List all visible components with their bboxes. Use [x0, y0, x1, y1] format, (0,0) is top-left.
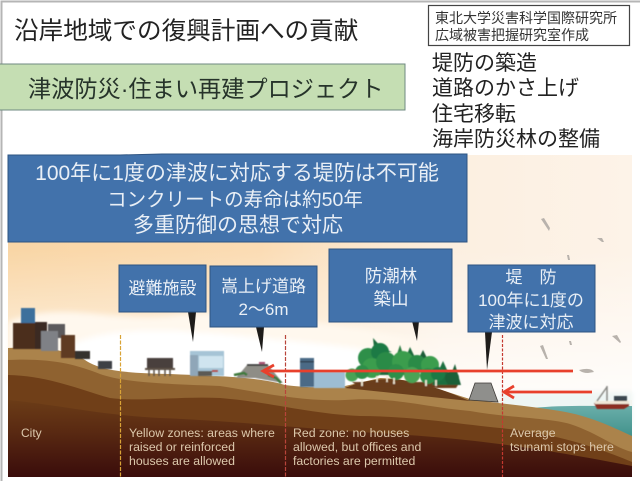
label: city: City: [21, 426, 42, 440]
label: yellow zones: Yellow zones: areas where: [129, 426, 275, 440]
title: 沿岸地域での復興計画への貢献: [14, 17, 358, 45]
credit box: 東北大学災害科学国際研究所: [435, 10, 617, 26]
illustration: coastal cross-section: [8, 155, 632, 477]
label: yellow zones: houses are allowed: [129, 454, 235, 468]
zone line: yellow: [120, 335, 122, 477]
label: yellow zones: raised or reinforced: [129, 440, 235, 454]
callout: coastal forest: 防潮林: [365, 266, 417, 286]
zone line: tsunami limit: [502, 335, 504, 477]
credit box: 広域被害把握研究室作成: [435, 27, 589, 43]
project banner: [0, 64, 405, 110]
ground top layer: [8, 348, 632, 477]
birds: [540, 218, 621, 373]
callout: raised road: 2〜6m: [238, 300, 289, 319]
callout: coastal forest: [329, 249, 452, 341]
icon: fishing boat: [594, 386, 629, 409]
clouds: [8, 312, 632, 425]
callout: seawall: 100年に1度の: [478, 291, 584, 310]
callout: coastal forest: 築山: [374, 289, 408, 309]
main message box: 多重防御の思想で対応: [133, 214, 343, 237]
icon: coastal forest: [346, 338, 461, 388]
callout: raised road: 嵩上げ道路: [221, 277, 306, 296]
label: average tsunami: tsunami stops here: [510, 440, 614, 454]
callout: seawall: [468, 265, 595, 370]
icon: raised house: [145, 358, 175, 376]
measures list: 住宅移転: [432, 103, 516, 126]
icon: evacuation building: [190, 351, 224, 376]
callout: evacuation facility: 避難施設: [128, 279, 196, 298]
ground third layer: [8, 375, 632, 477]
label: red zone: [293, 426, 421, 468]
zone line: red: [284, 335, 286, 477]
measures list: [432, 52, 600, 151]
callout: seawall: 堤 防: [506, 268, 556, 287]
sea: [533, 406, 632, 462]
icon: office building: [300, 358, 345, 388]
ground deep layer: [8, 400, 632, 477]
forest hill: [345, 379, 470, 401]
sky: [8, 155, 632, 477]
measures list: 道路のかさ上げ: [432, 77, 579, 100]
icon: city buildings: [13, 308, 112, 369]
label: average tsunami: Average: [510, 426, 556, 440]
label: red zone: Red zone: no houses: [293, 426, 409, 440]
callout: seawall: 津波に対応: [488, 313, 574, 332]
callout: raised road: [210, 266, 317, 352]
label: red zone: factories are permitted: [293, 454, 415, 468]
project banner: 津波防災·住まい再建プロジェクト: [28, 76, 384, 102]
arrow: average tsunami: [504, 386, 592, 398]
arrow: 100-year tsunami: [263, 365, 573, 377]
icon: raised road embankment: [234, 362, 283, 383]
ground second layer: [8, 360, 632, 477]
main message box: [8, 154, 467, 242]
main message box: 100年に1度の津波に対応する堤防は不可能: [35, 162, 439, 185]
label: average tsunami: [510, 426, 614, 454]
icon: seawall: [469, 383, 498, 402]
measures list: 海岸防災林の整備: [432, 128, 600, 151]
label: red zone: allowed, but offices and: [293, 440, 421, 454]
measures list: 堤防の築造: [432, 52, 537, 75]
label: yellow zones: [129, 426, 275, 468]
main message box: コンクリートの寿命は約50年: [107, 189, 363, 211]
callout: evacuation facility: [119, 265, 206, 342]
credit box: [428, 6, 630, 46]
